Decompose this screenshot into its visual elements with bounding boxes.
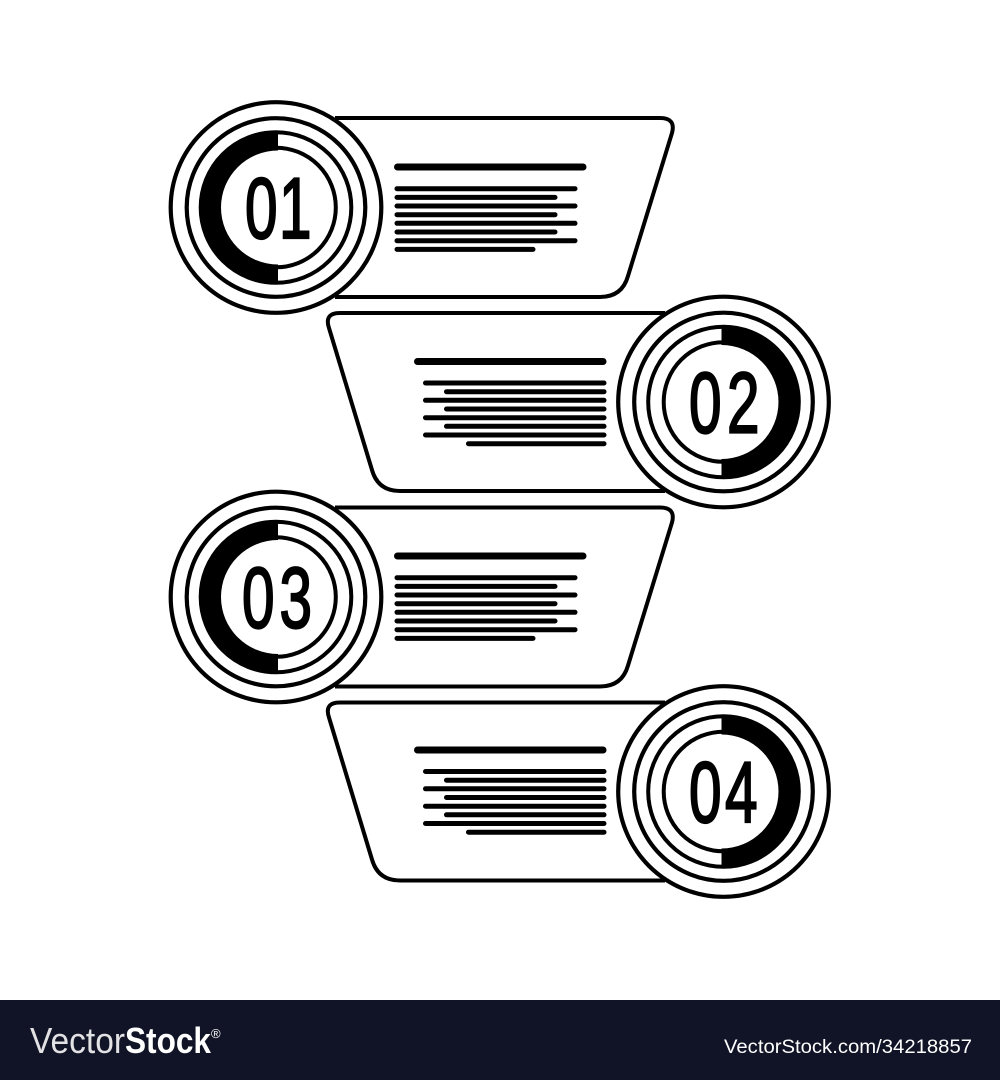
number 01: 0 bbox=[245, 160, 278, 257]
footer image id: VectorStock.com/34218857 bbox=[724, 1037, 972, 1058]
panel 3 text lines bbox=[397, 556, 583, 638]
footer logo bold: Stock bbox=[125, 1020, 212, 1061]
number 03 bbox=[242, 549, 312, 646]
badge 01 bbox=[171, 102, 381, 313]
number 01: 1 bbox=[279, 160, 312, 257]
panel: step 2 bbox=[328, 297, 829, 507]
panel: step 1 bbox=[171, 102, 673, 313]
number 02: 0 bbox=[689, 354, 722, 451]
badge 02 bbox=[618, 297, 829, 507]
number 01 bbox=[245, 160, 312, 257]
badge 04 bbox=[618, 686, 829, 897]
panel 3 outline bbox=[335, 508, 673, 686]
number 02 bbox=[689, 354, 760, 451]
panel 2 text lines bbox=[418, 362, 604, 444]
number 04: 4 bbox=[725, 744, 758, 841]
footer registered mark: ® bbox=[211, 1026, 221, 1041]
panel: step 4 bbox=[328, 686, 829, 897]
number 02: 2 bbox=[727, 354, 760, 451]
panel 2 outline bbox=[328, 313, 665, 491]
footer logo: Vector bbox=[30, 1020, 125, 1061]
badge 03 bbox=[171, 492, 381, 702]
number 03: 3 bbox=[280, 549, 312, 646]
footer bar bbox=[0, 1000, 1000, 1080]
panel: step 3 bbox=[171, 492, 673, 702]
number 04: 0 bbox=[689, 744, 722, 841]
panel 1 outline bbox=[335, 118, 673, 297]
number 04 bbox=[689, 744, 758, 841]
panel 4 outline bbox=[328, 702, 665, 880]
panel 1 text lines bbox=[397, 167, 583, 249]
number 03: 0 bbox=[242, 549, 275, 646]
panel 4 text lines bbox=[418, 750, 604, 832]
